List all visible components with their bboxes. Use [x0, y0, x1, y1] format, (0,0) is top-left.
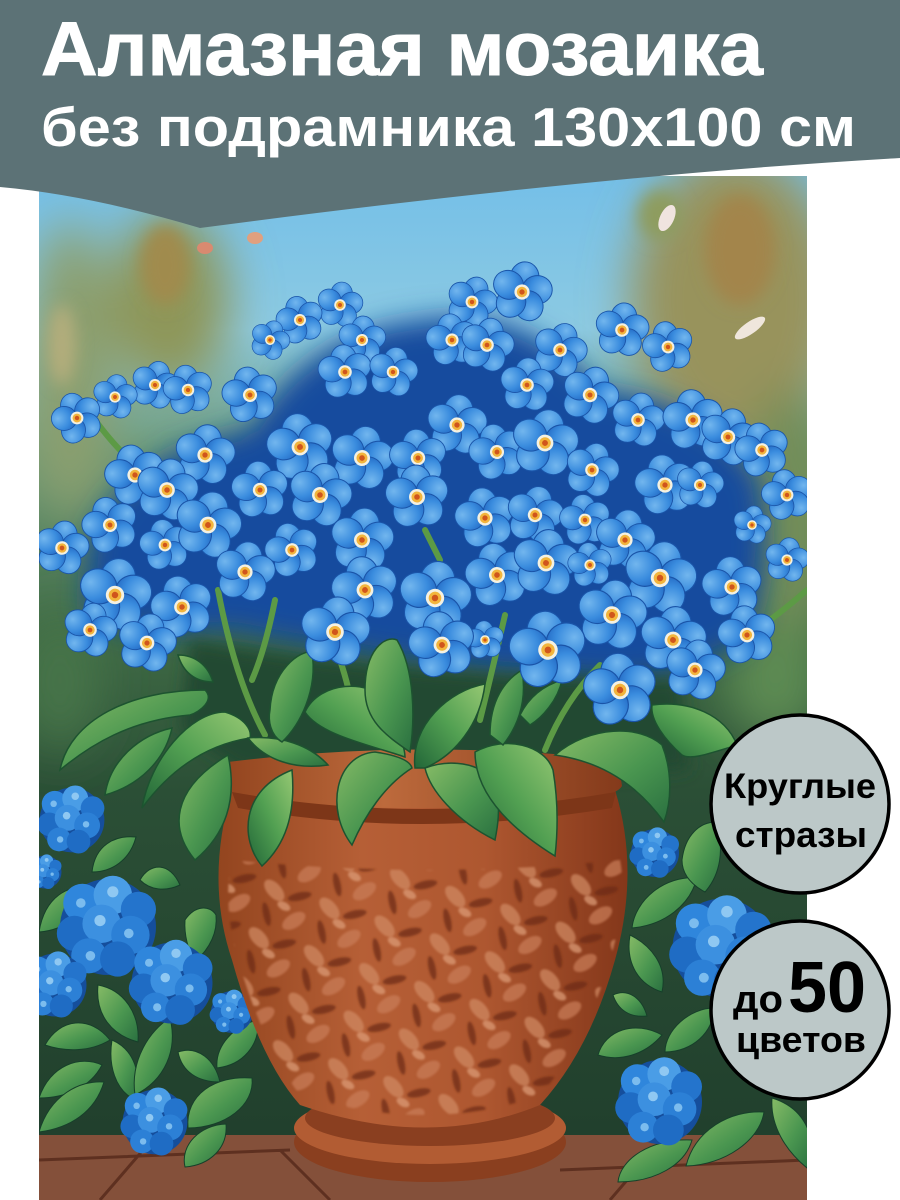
pot engraved ornament	[228, 860, 622, 1115]
badge: round rhinestones	[711, 715, 889, 893]
pot rim	[226, 749, 622, 808]
ground: brick terrace	[39, 1135, 807, 1200]
terracotta pot	[218, 749, 628, 1182]
blue forget-me-not blossoms	[28, 256, 820, 734]
badge: up to 50 colours: цветов	[736, 1019, 866, 1060]
painting: forget-me-nots in a terracotta pot	[20, 150, 840, 1200]
subtitle: без подрамника 130х100 см	[41, 96, 856, 158]
hydrangeas and leaves around the pot	[21, 785, 812, 1182]
dark blue mass behind the blossoms	[85, 316, 765, 680]
header banner	[0, 0, 900, 228]
pot body	[218, 790, 628, 1128]
green leaves of the plant	[60, 639, 737, 866]
flower stems	[95, 420, 807, 750]
title: Алмазная мозаика	[41, 7, 764, 92]
badge: up to 50 colours	[711, 921, 889, 1099]
painting background: sky and garden foliage	[39, 176, 807, 1135]
badge: round rhinestones: Круглые	[724, 767, 876, 806]
badge: up to 50 colours: до	[733, 979, 783, 1021]
dark green base under the blossoms	[180, 640, 690, 780]
badge: round rhinestones: стразы	[735, 814, 867, 855]
badge: up to 50 colours: 50	[788, 948, 866, 1028]
pot saucer	[294, 1104, 566, 1182]
